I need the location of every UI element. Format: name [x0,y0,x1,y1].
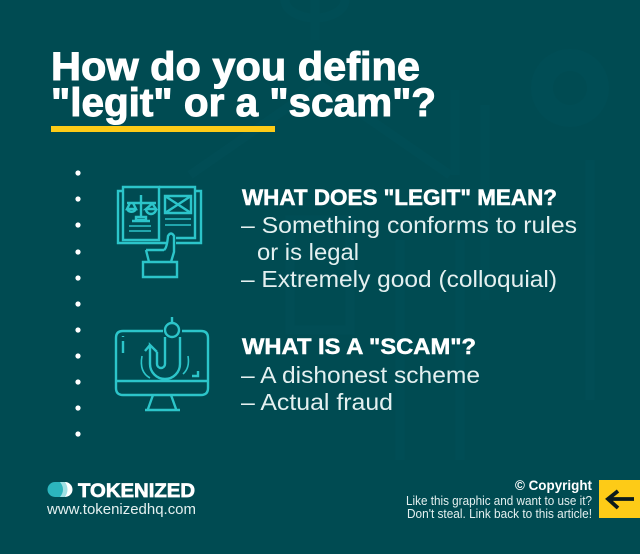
title: "legit" or a "scam"? [51,81,436,125]
title [51,45,436,125]
text block: what does legit mean: or is legal [257,239,359,265]
text block: what does legit mean [241,185,577,292]
text block: what is a scam [241,334,480,415]
text block: what does legit mean: – Extremely good (colloquial) [241,266,557,292]
text block: what does legit mean: WHAT DOES "LEGIT" MEAN? [242,185,557,210]
copyright notice [406,478,592,521]
title: How do you define [51,45,420,89]
icon: computer monitor with fishing hook [116,317,208,410]
dotted timeline [75,170,81,437]
copyright notice: © Copyright [515,478,592,493]
yellow back arrow button [599,480,640,518]
title underline [51,126,275,132]
text block: what is a scam: – Actual fraud [241,389,393,415]
text block: what is a scam: WHAT IS A "SCAM"? [242,334,476,359]
text block: what does legit mean: – Something conforms to rules [241,212,577,238]
copyright notice: Like this graphic and want to use it? [406,494,592,508]
copyright notice: Don't steal. Link back to this article! [407,507,592,521]
icon: open law book with hand [118,187,201,277]
text block: what is a scam: – A dishonest scheme [241,362,480,388]
logo: Tokenized: TOKENIZED [78,480,195,502]
website url: www.tokenizedhq.com [46,501,196,518]
